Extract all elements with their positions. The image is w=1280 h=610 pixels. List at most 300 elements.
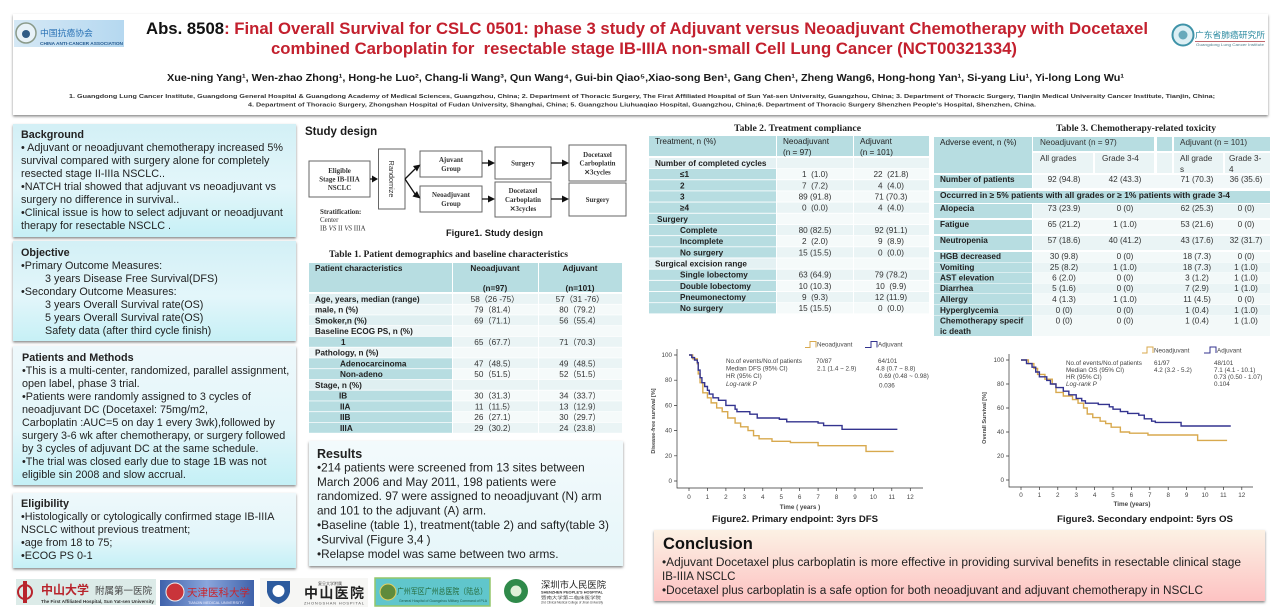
y axis tick labels: 0 xyxy=(668,478,672,485)
box: randomize: Randomize xyxy=(387,161,396,197)
table 3 neoadjuvant grade 3-4: 0 (0) xyxy=(1117,204,1134,213)
box: docetaxel carboplatin upper: ✕3cycles xyxy=(584,170,611,176)
table 3 labels: Vomiting xyxy=(940,263,974,272)
statistics: HR (95% CI) xyxy=(726,373,762,380)
y axis tick labels: 40 xyxy=(997,429,1004,436)
text: results body xyxy=(317,460,609,561)
table 1 neoadjuvant values: 50（51.5） xyxy=(474,370,516,379)
table 3 header: Adjuvant (n = 101) xyxy=(1180,138,1247,147)
table 3 adjuvant all grades: 43 (17.6) xyxy=(1181,236,1214,245)
table 3 adjuvant grade 3-4: 0 (0) xyxy=(1238,204,1255,213)
curve: adjuvant xyxy=(689,355,897,429)
table 2 header: Adjuvant xyxy=(860,137,893,146)
heading: results: Results xyxy=(317,447,362,461)
table 1 header: Patient characteristics xyxy=(315,264,403,273)
statistics: 2.1 (1.4 ~ 2.9) xyxy=(817,366,856,372)
table 1 neoadjuvant values: 69（71.1） xyxy=(474,316,516,325)
heading: background: Background xyxy=(21,129,84,141)
statistics: Log-rank P xyxy=(726,381,758,388)
table 3 adjuvant all grades xyxy=(1181,175,1214,326)
table 1 neoadjuvant values: 11（11.5） xyxy=(475,402,515,411)
table 3 header: Adverse event, n (%) xyxy=(940,138,1017,147)
table 1 neoadjuvant values: 79（81.4） xyxy=(474,306,516,315)
table 1 labels: Smoker,n (%) xyxy=(315,316,367,325)
panel: conclusion xyxy=(654,530,1265,601)
text: background body xyxy=(21,142,283,232)
table 3 bands xyxy=(934,175,1270,336)
text: objective body: 3 years Overall Survival rate(OS) xyxy=(45,299,203,311)
text: eligibility body xyxy=(21,511,275,562)
table 3 adjuvant grade 3-4: 32 (31.7) xyxy=(1230,236,1263,245)
table 3 labels: Hyperglycemia xyxy=(940,306,999,315)
table 2 labels: Number of completed cycles xyxy=(655,159,767,168)
x axis tick labels xyxy=(687,494,914,501)
table 1 adjuvant values: 13（12.9） xyxy=(559,402,601,411)
table 3 neoadjuvant all grades: 57 (18.6) xyxy=(1048,236,1081,245)
text: results body: •214 patients were screened from 13 sites between xyxy=(317,460,585,474)
text: conclusion body: •Docetaxel plus carboplatin is a safe option for both neoadjuvant and adjuvant chemotherapy in NSCLC xyxy=(662,585,1203,597)
table 2 adjuvant values: 4 (4.0) xyxy=(878,204,904,213)
table 3 header: All grades xyxy=(1040,154,1076,163)
chart: overall survival Kaplan-Meier xyxy=(982,347,1262,508)
table 2 labels: Double lobectomy xyxy=(680,282,751,291)
table 1 adjuvant values: 57（31 -76） xyxy=(556,295,604,304)
x axis tick labels: 4 xyxy=(1093,492,1097,499)
text: objective body: Safety data (after third cycle finish) xyxy=(45,325,211,337)
text: patients and methods body: neoadjuvant DC (Docetaxel: 75mg/m2, xyxy=(22,404,208,416)
title xyxy=(146,19,1148,58)
table 2 adjuvant values xyxy=(873,170,909,313)
table 3 neoadjuvant grade 3-4: 0 (0) xyxy=(1117,306,1134,315)
table 1 labels: IIB xyxy=(340,413,351,422)
table 1 labels: male, n (%) xyxy=(315,306,358,315)
logo: Zhongshan Hospital: 中山医院 xyxy=(304,585,364,601)
panel: background xyxy=(13,124,296,237)
text: patients and methods body: by 3 cycles of adjuvant DC at the same schedule. xyxy=(22,443,258,455)
table 3 adjuvant grade 3-4: 1 (1.0) xyxy=(1234,284,1258,293)
table 2 labels xyxy=(655,159,767,313)
title: Abs. 8508: Final Overall Survival for CSLC 0501: phase 3 study of Adjuvant versus Neoadjuvant Chemotherapy with Docetaxel xyxy=(146,19,1148,38)
table 1 adjuvant values: 49（48.5） xyxy=(559,359,601,368)
logo: China Anti-Cancer Association xyxy=(14,20,124,47)
table 3 adjuvant all grades: 11 (4.5) xyxy=(1183,295,1211,304)
text: eligibility body: •Histologically or cytologically confirmed stage IB-IIIA xyxy=(21,511,275,523)
text: stratification xyxy=(320,209,366,232)
table 2 neoadjuvant values: 0 (0.0) xyxy=(802,204,828,213)
heading: eligibility: Eligibility xyxy=(21,498,69,510)
table 3 neoadjuvant grade 3-4: 42 (43.3) xyxy=(1109,175,1142,184)
table 3 header: s xyxy=(1180,165,1184,174)
table 3 adjuvant grade 3-4: 0 (0) xyxy=(1238,220,1255,229)
text: conclusion body: IB-IIIA NSCLC xyxy=(662,571,736,583)
statistics xyxy=(726,358,929,390)
curve: adjuvant xyxy=(1021,360,1231,426)
table 3 labels: Chemotherapy specif xyxy=(940,316,1024,326)
table 3 header: Grade 3-4 xyxy=(1102,154,1139,163)
y axis tick labels xyxy=(661,352,672,485)
authors: Xue-ning Yang¹, Wen-zhao Zhong¹, Hong-he Luo², Chang-li Wang³, Qun Wang⁴, Gui-bin Qiao⁵,Xiao-song Ben¹, Gang Chen¹, Zheng Wang6, Hong-hong Yan¹, Si-yang Liu¹, Yi-long Long Wu¹ xyxy=(167,72,1125,84)
text: results body: •Baseline (table 1), treatment(table 2) and safty(table 3) xyxy=(317,518,609,532)
y axis tick labels: 20 xyxy=(665,453,672,460)
table 3 adjuvant all grades: 1 (0.4) xyxy=(1185,316,1209,326)
x axis tick labels: 9 xyxy=(1185,492,1189,499)
text: objective body xyxy=(21,260,218,337)
text: background body: •NATCH trial showed that adjuvant vs neoadjuvant vs xyxy=(21,181,277,193)
heading: study design: Study design xyxy=(305,126,377,138)
statistics: 0.104 xyxy=(1214,381,1230,388)
x axis tick labels: 1 xyxy=(706,494,710,501)
logo: China Anti-Cancer Association: CHINA ANTI-CANCER ASSOCIATION xyxy=(40,41,124,46)
table 1 labels: Non-adeno xyxy=(340,370,383,379)
y axis tick labels: 80 xyxy=(665,377,672,384)
table 3 neoadjuvant all grades: 92 (94.8) xyxy=(1048,175,1081,184)
panel: objective xyxy=(13,241,296,341)
table 1 adjuvant values: 52（51.5） xyxy=(559,370,601,379)
y axis tick labels: 60 xyxy=(665,402,672,409)
text: conclusion body: •Adjuvant Docetaxel plus carboplatin is more effective in providing survival benefits in resectable clinical stage xyxy=(662,557,1241,569)
logo: Guangdong Lung Cancer Institute xyxy=(1172,24,1265,47)
table 3 neoadjuvant grade 3-4 xyxy=(1109,175,1142,326)
table 2 header xyxy=(649,136,929,157)
table 2 labels: Single lobectomy xyxy=(680,271,748,280)
x axis tick labels: 8 xyxy=(835,494,839,501)
table 1 labels: Age, years, median (range) xyxy=(315,295,420,304)
x axis label: Time ( years ) xyxy=(780,504,820,511)
table 3 neoadjuvant all grades: 0 (0) xyxy=(1056,306,1073,315)
box: docetaxel carboplatin lower: Docetaxel xyxy=(509,188,537,195)
curve: neoadjuvant xyxy=(1021,360,1227,440)
table 1 neoadjuvant values: 30（31.3） xyxy=(474,392,516,401)
text: eligibility body: •ECOG PS 0-1 xyxy=(21,550,93,562)
x axis tick labels: 3 xyxy=(743,494,747,501)
y axis label: Overall Survival [%] xyxy=(982,392,988,444)
table 2 neoadjuvant values: 7 (7.2) xyxy=(802,181,828,190)
table 1 adjuvant values: 34（33.7） xyxy=(559,392,601,401)
caption: figure 2: Figure2. Primary endpoint: 3yrs DFS xyxy=(712,514,878,524)
table 2 header: Treatment, n (%) xyxy=(655,137,716,146)
table 2 adjuvant values: 4 (4.0) xyxy=(878,181,904,190)
x axis label: Time (years) xyxy=(1114,501,1150,508)
table 1 labels: Baseline ECOG PS, n (%) xyxy=(315,327,413,336)
table 3 neoadjuvant all grades: 6 (2.0) xyxy=(1052,274,1076,282)
table 3 labels: Occurred in ≥ 5% patients with all grades or ≥ 1% patients with grade 3-4 xyxy=(940,191,1230,200)
table 3 adjuvant all grades: 53 (21.6) xyxy=(1181,220,1214,229)
affiliations: 1. Guangdong Lung Cancer Institute, Guangdong General Hospital & Guangdong Academy of Medical Sciences, Guangzhou, China; 2. Department of Thoracic Surgery, The First Affiliated Hospital of Sun Yat-sen University, Guangzhou, China; 3. Department of Thoracic Surgery, Tianjin Medical University Cancer Institute, Tianjin, China; xyxy=(69,94,1215,100)
y axis tick labels: 40 xyxy=(665,428,672,435)
table 1 bands xyxy=(309,293,622,433)
y axis tick labels: 20 xyxy=(997,453,1004,460)
box: neoadjuvant group: Group xyxy=(441,201,461,208)
text: background body: resected stage II-IIIa NSCLC.. xyxy=(21,168,165,180)
table 3 adjuvant all grades: 62 (25.3) xyxy=(1181,204,1214,213)
text: results body: •Relapse model was same between two arms. xyxy=(317,547,558,561)
table 2 adjuvant values: 71 (70.3) xyxy=(875,192,908,201)
table 1 neoadjuvant values: 65（67.7） xyxy=(474,338,516,347)
box: ajuvant group: Ajuvant xyxy=(439,157,464,164)
text: results body: randomized. 97 were assigned to neoadjuvant (N) arm xyxy=(317,489,602,503)
text: results body: and 101 to the adjuvant (A) arm. xyxy=(317,504,486,518)
flow chart: study design xyxy=(309,145,626,232)
table 3 labels: Allergy xyxy=(940,295,968,304)
panel: results xyxy=(309,441,623,566)
box: docetaxel carboplatin upper: Docetaxel xyxy=(583,152,612,159)
table 2 adjuvant values: 9 (8.9) xyxy=(878,237,904,246)
table 2 labels: Pneumonectomy xyxy=(680,293,746,302)
table 1 neoadjuvant values xyxy=(471,295,519,433)
text: background body: •Clinical issue is how to select adjuvant or neoadjuvant xyxy=(21,207,283,219)
box: neoadjuvant group xyxy=(420,186,482,212)
table 3 labels: Alopecia xyxy=(940,204,975,213)
logo: Guangzhou Military Region General Hospital: 广州军区广州总医院（陆总） xyxy=(397,586,487,596)
table 3 neoadjuvant all grades xyxy=(1048,175,1081,326)
x axis tick labels: 2 xyxy=(1056,492,1060,499)
table 1 adjuvant values: 80（79.2） xyxy=(559,306,601,315)
table 2 neoadjuvant values: 89 (91.8) xyxy=(799,192,832,201)
statistics: 61/97 xyxy=(1154,360,1170,367)
table 3 adjuvant all grades: 1 (0.4) xyxy=(1185,306,1209,315)
x axis tick labels: 6 xyxy=(1130,492,1134,499)
caption: figure 1: Figure1. Study design xyxy=(446,228,543,238)
table 1 labels: Stage, n (%) xyxy=(315,381,362,390)
statistics: Log-rank P xyxy=(1066,381,1098,388)
logo: Zhongshan Hospital: 复旦大学附属 xyxy=(318,580,342,586)
table 1 labels: IIA xyxy=(340,402,351,411)
table 3 labels: Number of patients xyxy=(940,175,1015,184)
logo: Shenzhen People's Hospital: SHENZHEN PEOPLE'S HOSPITAL xyxy=(541,590,604,594)
text: eligibility body: NSCLC without previous treatment; xyxy=(21,524,190,536)
table 1 neoadjuvant values: 29（30.2） xyxy=(474,424,516,433)
affiliations: 4. Department of Thoracic Surgery, Zhongshan Hospital of Fudan University, Shanghai, China; 5. Guangzhou Liuhuaqiao Hospital, Guangzhou, China;6. Department of Thoracic Surgery Shenzhen People's Hospital, Shenzhen, China. xyxy=(248,102,1036,108)
table 1 neoadjuvant values: 47（48.5） xyxy=(474,359,516,368)
logo: Shenzhen People's Hospital: 深圳市人民医院 xyxy=(541,579,606,590)
x axis tick labels: 2 xyxy=(724,494,728,501)
box: surgery lower: Surgery xyxy=(586,197,610,204)
table 2 labels: Surgery xyxy=(657,215,688,224)
statistics: 4.8 (0.7 ~ 8.8) xyxy=(876,366,915,372)
table 2 labels: Incomplete xyxy=(680,237,724,246)
table 3 adjuvant all grades: 18 (7.3) xyxy=(1183,252,1211,261)
table 2 adjuvant values: 79 (78.2) xyxy=(875,271,908,280)
table 2 adjuvant values: 22 (21.8) xyxy=(873,170,909,179)
x axis tick labels: 11 xyxy=(1220,492,1227,499)
x axis tick labels: 1 xyxy=(1038,492,1042,499)
text: objective body: •Primary Outcome Measures: xyxy=(21,260,162,272)
logo: Shenzhen People's Hospital xyxy=(504,579,606,604)
heading: patients and methods: Patients and Methods xyxy=(22,352,134,364)
box: neoadjuvant group: Neoadjuvant xyxy=(432,192,471,199)
table 2 labels: No surgery xyxy=(680,248,724,257)
x axis tick labels: 12 xyxy=(907,494,914,501)
logo: Guangzhou Military Region General Hospital xyxy=(375,578,490,606)
table 3 header xyxy=(934,137,1270,174)
x axis tick labels: 7 xyxy=(816,494,820,501)
table 3 adjuvant grade 3-4: 1 (1.0) xyxy=(1234,274,1258,282)
table 3 labels: Diarrhea xyxy=(940,284,974,293)
table 3 adjuvant all grades: 71 (70.3) xyxy=(1181,175,1214,184)
table 3 adjuvant grade 3-4: 1 (1.0) xyxy=(1234,316,1258,326)
table 2 neoadjuvant values: 15 (15.5) xyxy=(799,304,832,313)
statistics: 7.1 (4.1 - 10.1) xyxy=(1214,367,1255,374)
statistics: 48/101 xyxy=(1214,360,1234,367)
text: patients and methods body: •This is a multi-center, randomized, parallel assignment, xyxy=(22,365,289,377)
table 1 labels xyxy=(315,295,420,433)
table 1 labels: 1 xyxy=(341,338,346,347)
logo: Sun Yat-sen University first affiliated hospital xyxy=(16,579,156,605)
table 3 neoadjuvant all grades: 25 (8.2) xyxy=(1050,263,1078,272)
box: eligible xyxy=(309,161,370,197)
legend: Neoadjuvant xyxy=(817,342,853,348)
statistics: 0.036 xyxy=(879,382,895,390)
text: results body: March 2006 and May 2011, 198 patients were xyxy=(317,475,557,489)
table 3 adjuvant grade 3-4: 36 (35.6) xyxy=(1230,175,1263,184)
chart: disease-free survival Kaplan-Meier xyxy=(651,342,929,511)
logo: Shenzhen People's Hospital: 暨南大学第二临床医学院 xyxy=(541,594,601,600)
heading: objective: Objective xyxy=(21,247,70,259)
table 3 labels: HGB decreased xyxy=(940,252,1001,261)
panel: eligibility xyxy=(13,493,296,568)
table 2 labels: Complete xyxy=(680,226,718,235)
arrows xyxy=(370,160,569,202)
table 2 bands xyxy=(649,157,929,314)
x axis tick labels: 5 xyxy=(779,494,783,501)
table 2 header: (n = 97) xyxy=(783,148,812,157)
box: surgery upper: Surgery xyxy=(511,160,535,168)
y axis tick labels: 60 xyxy=(997,405,1004,412)
text: stratification: Stratification: xyxy=(320,209,361,216)
x axis tick labels: 10 xyxy=(1201,492,1209,499)
box: eligible: Stage IB-IIIA xyxy=(319,176,360,184)
table 1 adjuvant values: 56（55.4） xyxy=(559,316,601,325)
table 3 neoadjuvant all grades: 30 (9.8) xyxy=(1050,252,1078,261)
legend xyxy=(1142,347,1242,354)
table 3 adjuvant grade 3-4: 0 (0) xyxy=(1238,252,1255,261)
affiliations xyxy=(69,94,1215,108)
table 1 adjuvant values: 30（29.7） xyxy=(559,413,601,422)
legend: Neoadjuvant xyxy=(1154,348,1190,354)
axes xyxy=(1006,354,1253,490)
table 1 header xyxy=(309,263,622,293)
logo: Zhongshan Hospital xyxy=(260,578,368,607)
table 3 labels xyxy=(940,175,1230,336)
y axis tick labels: 100 xyxy=(993,357,1004,364)
table 3 neoadjuvant grade 3-4: 0 (0) xyxy=(1117,316,1134,326)
table 2 header: (n = 101) xyxy=(860,148,893,157)
table 2 labels: ≤1 xyxy=(680,170,689,179)
x axis tick labels xyxy=(1019,492,1246,499)
text: background body: • Adjuvant or neoadjuvant chemotherapy increased 5% xyxy=(21,142,283,154)
x axis tick labels: 4 xyxy=(761,494,765,501)
statistics: 0.69 (0.48 ~ 0.98) xyxy=(879,373,929,380)
table 1 title: Table 1. Patient demographics and baseline characteristics xyxy=(329,249,568,259)
text: stratification: Center xyxy=(320,217,339,224)
table 2 labels: 2 xyxy=(680,181,685,190)
y axis tick labels: 80 xyxy=(997,381,1004,388)
table 3 header: 4 xyxy=(1229,165,1234,174)
box: surgery lower xyxy=(569,183,626,216)
table 1 header: Neoadjuvant xyxy=(470,264,520,273)
table 3 neoadjuvant all grades: 73 (23.9) xyxy=(1048,204,1081,213)
table 1 labels: IIIA xyxy=(340,424,353,433)
table 3 neoadjuvant all grades: 65 (21.2) xyxy=(1048,220,1081,229)
box: docetaxel carboplatin lower: ✕3cycles xyxy=(510,206,537,213)
x axis tick labels: 8 xyxy=(1166,492,1170,499)
table 2 labels: ≥4 xyxy=(680,204,689,213)
x axis tick labels: 3 xyxy=(1074,492,1078,499)
legend: Adjuvant xyxy=(878,342,903,348)
table 1: patient demographics xyxy=(309,249,622,433)
table 3 labels: Fatigue xyxy=(940,220,970,229)
table 2 adjuvant values: 0 (0.0) xyxy=(878,304,904,313)
box: eligible: NSCLC xyxy=(328,185,351,192)
table 3: chemotherapy-related toxicity xyxy=(934,123,1270,336)
axes xyxy=(674,349,923,491)
table 3 adjuvant grade 3-4: 1 (1.0) xyxy=(1234,306,1258,315)
x axis tick labels: 5 xyxy=(1111,492,1115,499)
table 3 header: Grade 3- xyxy=(1229,154,1262,163)
table 3 neoadjuvant all grades: 5 (1.6) xyxy=(1052,284,1076,293)
statistics: No.of events/No.of patients xyxy=(726,358,802,365)
text: patients and methods body: eligible sin 2008 and slow accrual. xyxy=(22,469,186,481)
statistics: 64/101 xyxy=(878,358,898,365)
table 3 labels: ic death xyxy=(940,327,971,336)
table 3 neoadjuvant grade 3-4: 1 (1.0) xyxy=(1113,295,1137,304)
x axis tick labels: 9 xyxy=(853,494,857,501)
logo: Sun Yat-sen University first affiliated hospital: 附属第一医院 xyxy=(95,585,153,597)
curve: neoadjuvant xyxy=(689,355,894,451)
x axis tick labels: 0 xyxy=(1019,492,1023,499)
logo: Tianjin Medical University: TIANJIN MEDICAL UNIVERSITY xyxy=(188,601,244,605)
table 2 neoadjuvant values: 1 (1.0) xyxy=(802,170,828,179)
table 1 adjuvant values: 24（23.8） xyxy=(559,424,601,433)
text: objective body: 5 years Overall Survival rate(OS) xyxy=(45,312,203,324)
text: conclusion body xyxy=(662,557,1241,597)
statistics: No.of events/No.of patients xyxy=(1066,360,1142,367)
logo: Guangdong Lung Cancer Institute: Guangdong Lung Cancer Institute xyxy=(1196,43,1264,47)
statistics: HR (95% CI) xyxy=(1066,374,1102,381)
table 1 labels: IB xyxy=(339,392,347,401)
table 3 neoadjuvant grade 3-4: 1 (1.0) xyxy=(1113,220,1137,229)
panel: patients and methods xyxy=(13,346,296,485)
table 3 title: Table 3. Chemotherapy-related toxicity xyxy=(1056,123,1216,133)
table 1 neoadjuvant values: 58（26 -75） xyxy=(471,295,519,304)
table 2 adjuvant values: 12 (11.9) xyxy=(875,293,907,302)
heading: conclusion: Conclusion xyxy=(663,535,753,553)
table 1 header: (n=101) xyxy=(566,284,595,293)
box: docetaxel carboplatin upper xyxy=(569,145,626,181)
text: background body: survival compared with surgery alone for completely xyxy=(21,155,270,167)
table 3 neoadjuvant grade 3-4: 40 (41.2) xyxy=(1109,236,1142,245)
legend xyxy=(805,342,903,348)
table 1 labels: Adenocarcinoma xyxy=(340,359,407,368)
table 1 header: (n=97) xyxy=(483,284,507,293)
table 3 adjuvant grade 3-4: 0 (0) xyxy=(1238,295,1255,304)
text: patients and methods body xyxy=(22,365,289,481)
table 3 adjuvant grade 3-4: 1 (1.0) xyxy=(1234,263,1258,272)
table 3 neoadjuvant all grades: 4 (1.3) xyxy=(1052,295,1076,304)
table 2 neoadjuvant values: 10 (10.3) xyxy=(799,282,832,291)
x axis tick labels: 7 xyxy=(1148,492,1152,499)
table 3 neoadjuvant grade 3-4: 1 (1.0) xyxy=(1113,263,1137,272)
table 3 neoadjuvant grade 3-4: 0 (0) xyxy=(1117,284,1134,293)
table 1 adjuvant values: 71（70.3） xyxy=(559,338,601,347)
table 3 header: Neoadjuvant (n = 97) xyxy=(1040,138,1117,147)
logo: Guangzhou Military Region General Hospital: General Hospital of Guangzhou Military Command of PLA xyxy=(399,599,487,603)
table 2 neoadjuvant values: 80 (82.5) xyxy=(799,226,832,235)
header panel xyxy=(13,14,1268,115)
table 2 neoadjuvant values xyxy=(799,170,832,313)
logo: Tianjin Medical University xyxy=(160,580,254,606)
text: background body: therapy for resectable NSCLC . xyxy=(21,220,171,232)
